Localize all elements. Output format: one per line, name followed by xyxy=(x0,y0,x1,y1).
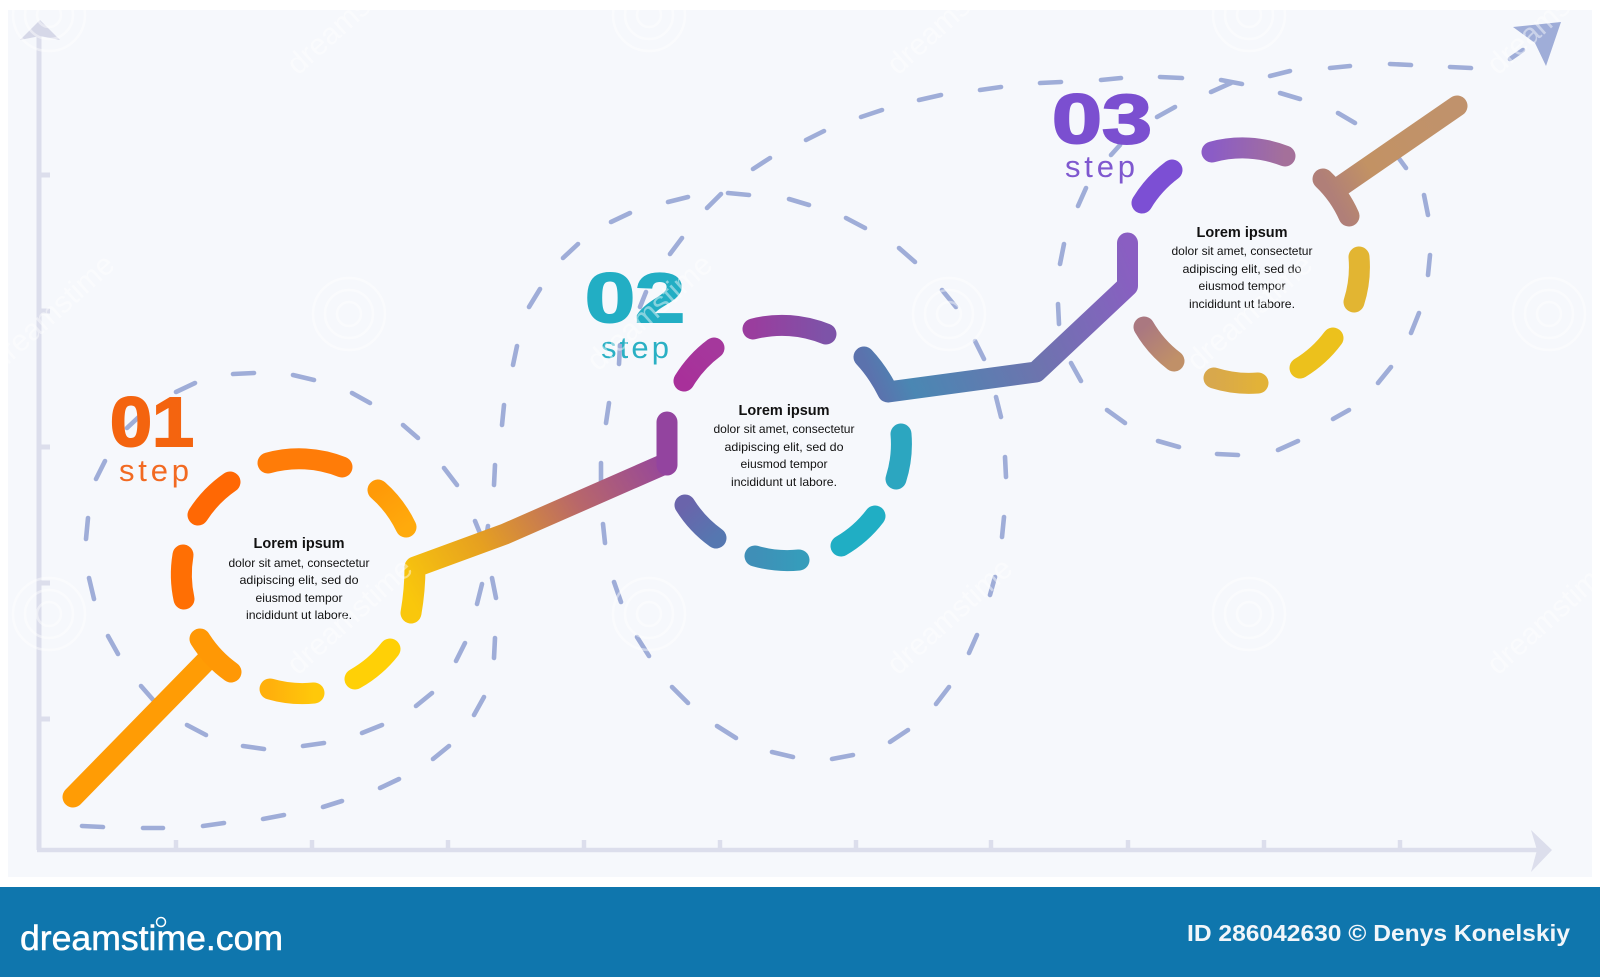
step 2 label: step xyxy=(601,330,669,365)
step 1 ring segments xyxy=(181,459,406,694)
step 3 text block: Lorem ipsum xyxy=(1196,225,1288,241)
step 3 text block xyxy=(1172,225,1312,311)
step 2 ring segments xyxy=(667,325,901,561)
step 1 number: 01 xyxy=(110,383,194,461)
x axis with ticks xyxy=(37,840,1540,850)
start line into step 1 xyxy=(73,660,207,797)
footer image credit: ID 286042630 © Denys Konelskiy xyxy=(1187,920,1570,946)
step 2 text block: adipiscing elit, sed do xyxy=(724,440,844,454)
step 1 text block: Lorem ipsum xyxy=(254,536,344,552)
step 1 text block: eiusmod tempor xyxy=(256,591,342,605)
step 3 xyxy=(1142,106,1457,383)
step 2 xyxy=(667,243,1128,561)
arrowhead of guide path xyxy=(1513,22,1561,66)
step 3 ring segments xyxy=(1142,148,1359,383)
step 3 text block: eiusmod tempor xyxy=(1198,279,1286,293)
y axis with arrow xyxy=(39,36,50,850)
watermark overlay xyxy=(0,0,1600,681)
step 2 text block: dolor sit amet, consectetur xyxy=(714,422,854,436)
step 3 text block: adipiscing elit, sed do xyxy=(1182,262,1302,276)
step 1 text block xyxy=(228,536,370,622)
watermark overlay: dreamstime xyxy=(881,552,1019,681)
step 3 T-shaped arc and exit line xyxy=(1323,106,1457,216)
step 2 text block: Lorem ipsum xyxy=(738,403,830,419)
dashed guide spiral xyxy=(82,50,1523,828)
step 2 number: 02 xyxy=(585,259,685,337)
step 1 label: step xyxy=(119,453,189,488)
step 1 text block: incididunt ut labore. xyxy=(246,608,352,622)
step 2 text block: eiusmod tempor xyxy=(740,457,828,471)
step 3 number: 03 xyxy=(1052,80,1152,158)
step 1 text block: dolor sit amet, consectetur xyxy=(228,556,370,570)
step 3 text block: dolor sit amet, consectetur xyxy=(1172,244,1312,258)
step 3 label: step xyxy=(1065,149,1135,184)
watermark overlay: dreamstime xyxy=(1181,248,1319,377)
step 1 xyxy=(73,459,667,797)
watermark overlay: dreamstime xyxy=(281,552,419,681)
watermark overlay: dreamstime xyxy=(581,248,719,377)
x axis arrowhead xyxy=(1531,830,1552,872)
y axis arrowhead xyxy=(20,20,60,40)
footer logo: dreamstime.com xyxy=(20,919,283,958)
step 1 text block: adipiscing elit, sed do xyxy=(240,573,359,587)
step 2 text block xyxy=(714,403,854,489)
connector from step 2 to step 3 xyxy=(864,243,1128,392)
connector from step 1 to step 2 xyxy=(411,463,667,613)
step 2 text block: incididunt ut labore. xyxy=(731,475,837,489)
footer bar xyxy=(0,887,1600,977)
step 3 text block: incididunt ut labore. xyxy=(1189,297,1295,311)
